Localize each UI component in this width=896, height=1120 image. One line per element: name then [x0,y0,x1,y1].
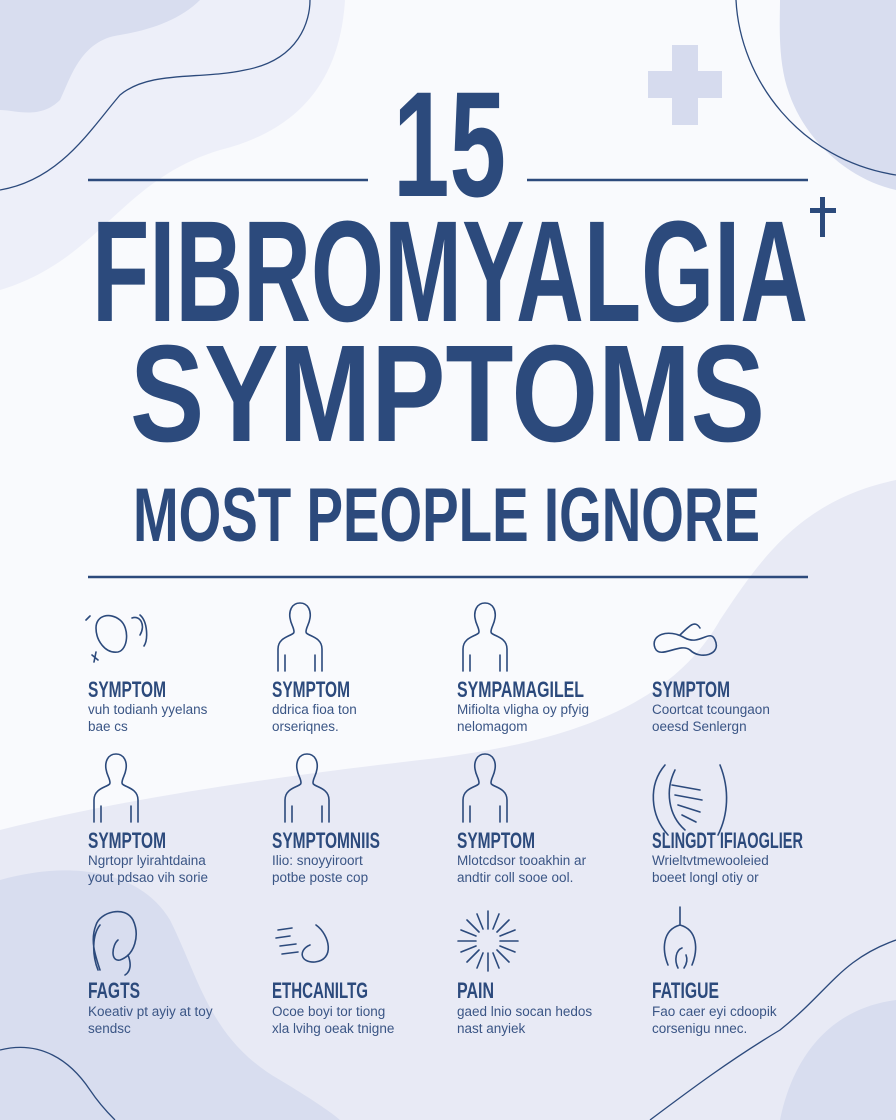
item 3: nelomagom [457,719,528,734]
item 3: Mifiolta vligha oy pfyig [457,702,589,717]
item 8: boeet longl otiy or [652,870,759,885]
item 9: sendsc [88,1021,131,1036]
item 8: Wrieltvtmewooleied [652,853,769,868]
item 4 [652,624,770,734]
item 11: PAIN [457,978,494,1003]
item 6 [272,754,380,885]
item 2: orseriqnes. [272,719,339,734]
item 7: SYMPTOM [457,828,535,853]
item 2: ddrica fioa ton [272,702,357,717]
item 5 [88,754,208,885]
title: SYMPTOMS [130,317,765,471]
item 3 [457,603,589,734]
item 10 [272,925,394,1036]
item 1: vuh todianh yyelans [88,702,208,717]
item 11: gaed lnio socan hedos [457,1004,592,1019]
item 4: oeesd Senlergn [652,719,747,734]
item 9: FAGTS [88,978,140,1003]
item 9 [88,912,213,1036]
item 1: SYMPTOM [88,677,166,702]
item 5: yout pdsao vih sorie [88,870,208,885]
item 3: SYMPAMAGILEL [457,677,584,702]
item 12: FATIGUE [652,978,719,1003]
item 6: potbe poste cop [272,870,368,885]
item 7: andtir coll sooe ool. [457,870,573,885]
item 12 [652,907,777,1036]
item 6: SYMPTOMNIIS [272,828,380,853]
item 10: xla lvihg oeak tnigne [272,1021,394,1036]
item 10: Ocoe boyi tor tiong [272,1004,385,1019]
item 5: Ngrtopr lyirahtdaina [88,853,206,868]
item 4: Coortcat tcoungaon [652,702,770,717]
item 1: bae cs [88,719,128,734]
item 1 [86,615,208,734]
item 9: Koeativ pt ayiy at toy [88,1004,213,1019]
item 10: ETHCANILTG [272,978,368,1003]
item 7 [457,754,587,885]
title [88,60,836,577]
item 11 [457,911,592,1036]
item 8: SLINGDT IFIAOGLIER [652,828,803,853]
item 7: Mlotcdsor tooakhin ar [457,853,587,868]
title: 15 [393,60,506,228]
item 11: nast anyiek [457,1021,526,1036]
item 4: SYMPTOM [652,677,730,702]
item 8 [652,765,803,885]
item 2 [272,603,357,734]
item 12: corsenigu nnec. [652,1021,747,1036]
item 6: Ilio: snoyyiroort [272,853,363,868]
item 12: Fao caer eyi cdoopik [652,1004,777,1019]
item 5: SYMPTOM [88,828,166,853]
item 2: SYMPTOM [272,677,350,702]
icon: plus decoration [648,45,722,125]
symptom grid [86,603,803,1036]
